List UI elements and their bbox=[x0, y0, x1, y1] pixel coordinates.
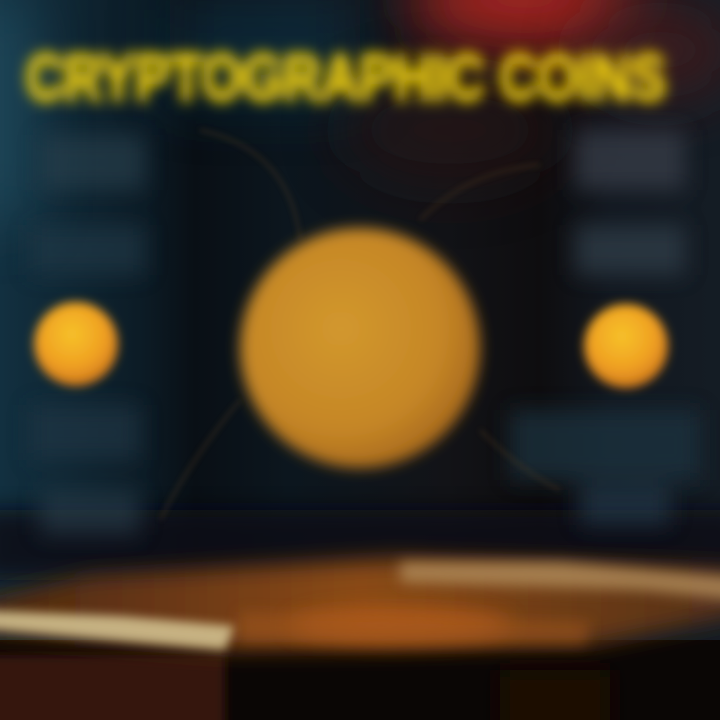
panel: right text column bbox=[510, 130, 700, 525]
icon: right coin bbox=[584, 304, 668, 388]
icon: left coin bbox=[34, 302, 118, 386]
panel: left text column bbox=[30, 135, 145, 535]
icon: central coin bbox=[240, 228, 480, 468]
table surface bbox=[0, 558, 720, 720]
connector lines bbox=[160, 130, 560, 520]
